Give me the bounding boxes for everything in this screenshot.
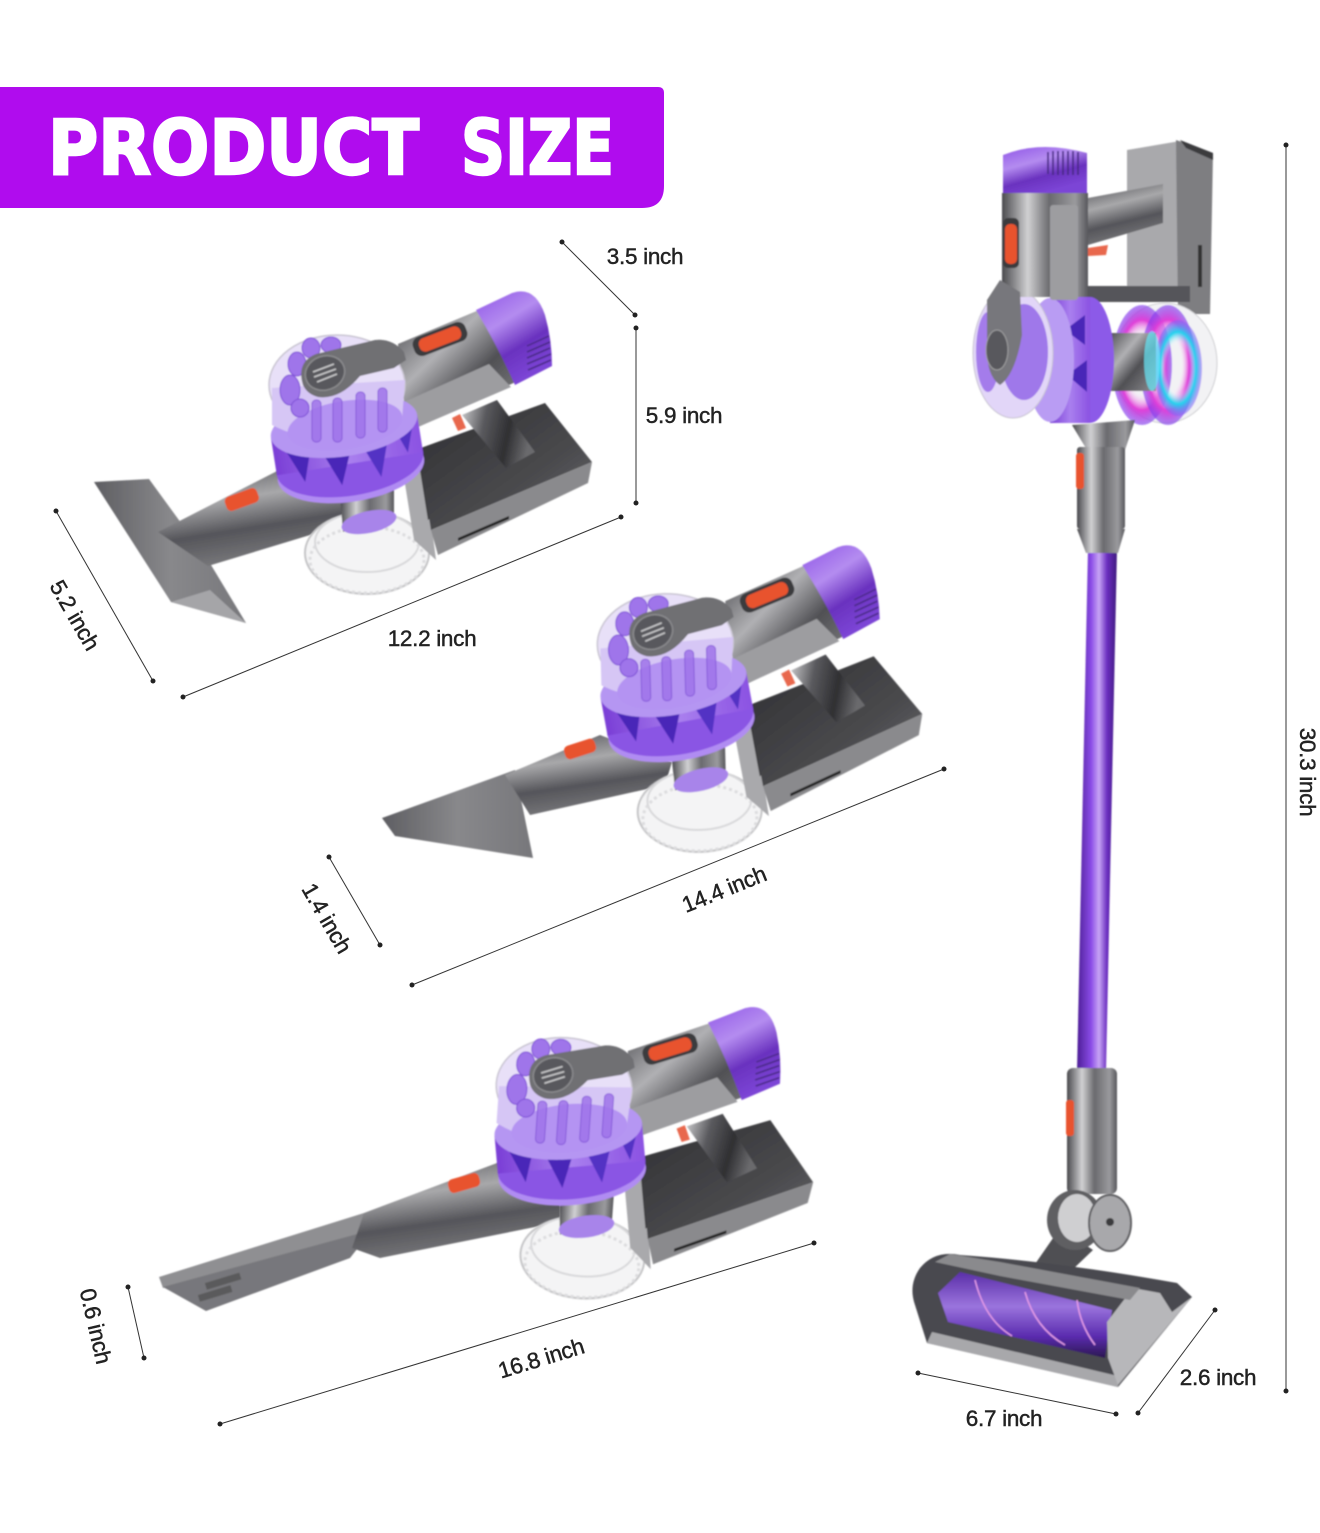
dimension: 1.4 inch: 1.4 inch (297, 879, 356, 958)
dimension: 5.9 inch (634, 326, 722, 506)
dimension: 2.6 inch (1136, 1308, 1256, 1416)
dimension: 5.2 inch: 5.2 inch (45, 576, 104, 655)
banner: product size heading (0, 87, 664, 208)
upright stick vacuum (912, 140, 1217, 1387)
dimension: 3.5 inch (560, 240, 683, 318)
handheld vacuum with flat nozzle (382, 543, 926, 858)
lid (986, 280, 1022, 385)
dimension: 16.8 inch (218, 1240, 816, 1426)
dimension: 12.2 inch: 12.2 inch (388, 626, 476, 651)
wand (1077, 548, 1117, 1072)
banner: product size heading: SIZE (461, 103, 614, 192)
swivel neck (1033, 1190, 1131, 1272)
dimension: 6.7 inch (916, 1370, 1118, 1431)
dimension: 0.6 inch (75, 1284, 146, 1366)
dimension: 0.6 inch: 0.6 inch (75, 1286, 116, 1366)
dimension: 3.5 inch: 3.5 inch (607, 244, 683, 269)
handheld vacuum with wide brush tool (94, 291, 592, 623)
motor body and cap (1002, 147, 1088, 300)
handheld body 3 (479, 989, 825, 1314)
dimension: 5.2 inch (45, 508, 156, 684)
dimension: 12.2 inch (180, 514, 624, 700)
battery (1080, 140, 1213, 314)
floor head (912, 1254, 1192, 1387)
dimension: 14.4 inch (410, 766, 946, 988)
handheld vacuum with crevice tool (159, 989, 825, 1314)
dimension: 30.3 inch (1284, 142, 1320, 1394)
lower clear bin with light rings (1108, 303, 1217, 425)
neck and coupler (1072, 420, 1135, 553)
handheld body 2 (592, 543, 926, 855)
tool: long crevice nozzle (159, 1160, 560, 1311)
handheld body 1 (266, 291, 592, 594)
dimension: 5.9 inch: 5.9 inch (646, 403, 722, 428)
dimension: 6.7 inch: 6.7 inch (966, 1406, 1042, 1431)
dimension: 30.3 inch: 30.3 inch (1295, 728, 1320, 816)
dimension: 2.6 inch: 2.6 inch (1180, 1365, 1256, 1390)
tool: flat wedge nozzle (382, 735, 672, 858)
dimension: 14.4 inch: 14.4 inch (678, 861, 770, 918)
connector tube (1066, 1068, 1117, 1194)
cyclone ring (1026, 297, 1114, 423)
tool: wide blade nozzle (94, 468, 343, 623)
dimension: 1.4 inch (297, 854, 382, 958)
top clear dome (973, 288, 1053, 418)
dimension: 16.8 inch: 16.8 inch (495, 1334, 587, 1383)
banner: product size heading: PRODUCT (48, 103, 419, 192)
